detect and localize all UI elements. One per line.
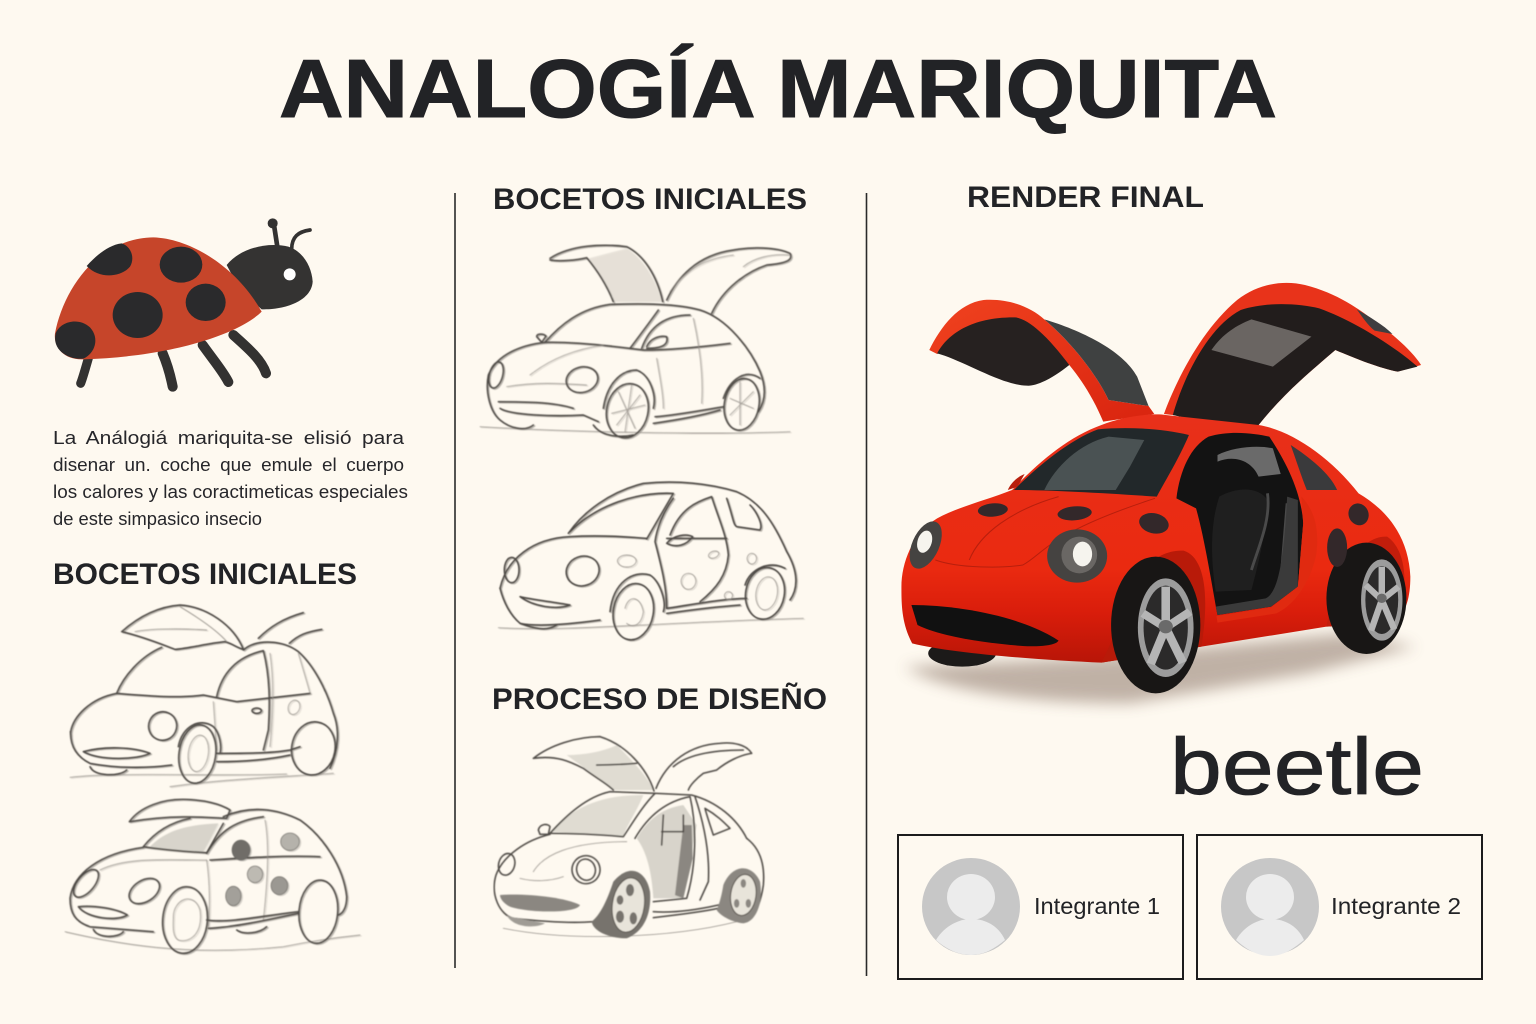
grille xyxy=(911,605,1059,646)
text block: description xyxy=(53,428,408,529)
sketch: car with antennae xyxy=(70,605,341,788)
illustration: ladybug car render xyxy=(901,283,1421,703)
card: integrante 2 xyxy=(1197,835,1482,979)
brand word: beetle: beetle xyxy=(1170,722,1424,811)
windshield xyxy=(1014,428,1189,497)
near door xyxy=(1164,283,1421,427)
headlights xyxy=(903,517,1107,583)
hood line xyxy=(935,497,1155,567)
heading: bocetos iniciales left: BOCETOS INICIALES xyxy=(53,558,357,591)
text block: description: disenar un. coche que emule el cuerpo xyxy=(53,455,404,475)
front wheel xyxy=(1111,557,1200,693)
door sill xyxy=(1216,497,1317,623)
car shadow xyxy=(905,633,1416,703)
card: integrante 1: Integrante 1 xyxy=(1034,893,1160,919)
rear wheel xyxy=(1326,543,1406,654)
sketch: car with spots xyxy=(65,799,361,956)
wheel arches xyxy=(1101,551,1205,663)
heading: proceso de diseño: PROCESO DE DISEÑO xyxy=(492,682,827,716)
spots xyxy=(977,501,1371,567)
far door xyxy=(929,300,1154,422)
card: integrante 2: Integrante 2 xyxy=(1331,893,1461,919)
door opening and interior xyxy=(1176,433,1303,615)
text block: description: La Análogiá mariquita-se elisió para xyxy=(53,428,405,448)
text block: description: de este simpasico insecio xyxy=(53,509,262,529)
rear side window xyxy=(1291,445,1337,490)
body xyxy=(901,414,1410,663)
sketch: car with raised doors xyxy=(480,245,792,443)
card: integrante 1 xyxy=(898,835,1183,979)
title: ANALOGÍA MARIQUITA xyxy=(279,42,1277,135)
text block: description: los calores y las coractimeticas especiales xyxy=(53,482,408,502)
avatar 2 xyxy=(1221,858,1319,956)
avatar 1 xyxy=(922,858,1020,955)
heading: render final: RENDER FINAL xyxy=(967,181,1204,214)
icon: ladybug xyxy=(55,218,313,387)
sketch: design process car xyxy=(494,737,764,938)
sketch: closed door car xyxy=(498,482,805,644)
heading: bocetos iniciales center: BOCETOS INICIALES xyxy=(493,183,807,216)
